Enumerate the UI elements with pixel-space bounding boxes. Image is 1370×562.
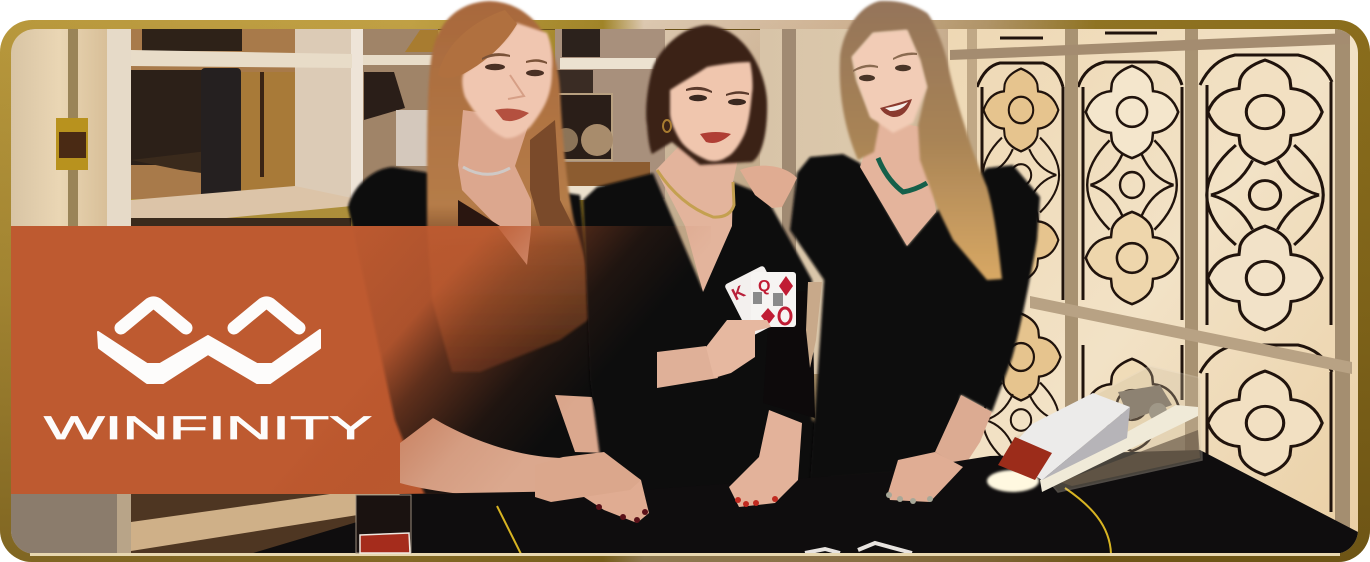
deck top (1003, 393, 1130, 480)
dress (790, 154, 1040, 480)
upper shelf right (363, 55, 435, 65)
bottom rim highlight (30, 553, 1340, 556)
wall bracket (56, 118, 88, 170)
lower shelf (131, 186, 352, 218)
shoe case (1012, 366, 1202, 492)
lower shelf area (131, 494, 356, 553)
hand left woman upper (535, 452, 641, 502)
woman middle (583, 25, 830, 495)
column (107, 29, 131, 229)
neck and chest (860, 118, 936, 246)
beige gap at waist (806, 282, 822, 368)
lamp (405, 30, 440, 52)
hair (427, 1, 595, 372)
yellow line right (1065, 488, 1111, 554)
lips (495, 109, 529, 121)
forearm (400, 418, 565, 497)
lattice vertical bars (1065, 29, 1078, 459)
room behind left woman (363, 29, 438, 199)
card queen: Q (758, 278, 770, 295)
brows and eyes (853, 53, 917, 81)
shelving interior (131, 29, 301, 199)
hand holding cards (706, 320, 771, 378)
hand right woman (888, 452, 963, 502)
shoe mechanism (1118, 385, 1172, 420)
deck side (1042, 407, 1130, 480)
lips (700, 132, 731, 143)
dress (583, 173, 830, 495)
logo mark (98, 303, 320, 383)
nails right (886, 492, 933, 504)
hand left woman lower (584, 480, 649, 523)
table (250, 450, 1358, 554)
column middle (295, 29, 351, 204)
shoe rail (1040, 405, 1198, 492)
card box left (356, 495, 411, 553)
brows and eyes (686, 87, 749, 105)
face (852, 30, 927, 133)
brass rod (68, 29, 78, 229)
hand on shoulder (740, 166, 797, 208)
room behind middle woman (555, 29, 665, 199)
face (670, 62, 753, 161)
left wall (11, 29, 107, 554)
lattice horizontal bars (950, 33, 1350, 60)
card shoe (987, 366, 1202, 492)
picture frame (554, 94, 613, 160)
playing cards (706, 265, 796, 378)
shelf behind middle woman (560, 58, 656, 69)
chest (656, 145, 740, 292)
gold necklace (657, 170, 734, 217)
upper shelf (131, 50, 352, 68)
hands (535, 410, 963, 523)
dark under hair (530, 120, 573, 226)
hair (646, 25, 767, 165)
green necklace (878, 158, 927, 192)
table logo fragment (805, 543, 912, 553)
panel one motifs (984, 69, 1058, 151)
silver necklace (463, 167, 510, 174)
bottle (201, 68, 241, 200)
hair (840, 1, 1002, 280)
neck and chest (458, 110, 531, 265)
centre wall (760, 29, 955, 374)
nails left (596, 504, 648, 523)
right forearm (935, 395, 992, 468)
shoe lower tray (1060, 430, 1200, 486)
red card back (998, 437, 1052, 480)
hair fringe (438, 10, 517, 78)
dress (348, 167, 606, 495)
nails middle (735, 496, 778, 507)
brand panel underlay (270, 374, 426, 494)
brows and eyes (482, 53, 547, 76)
translucent brand panel (11, 226, 711, 494)
face (462, 23, 552, 138)
wordmark: WINFINITY (44, 410, 372, 446)
dark v beside chest (458, 200, 500, 226)
middle arm sleeve (763, 290, 815, 418)
panel frames (977, 33, 1332, 512)
earring (663, 120, 671, 132)
lips and teeth (880, 99, 912, 117)
nose shadow (508, 75, 524, 99)
middle forearm and hand (729, 410, 802, 507)
panel three motifs (1208, 60, 1322, 164)
woman right (740, 1, 1040, 480)
wooden box (558, 162, 650, 186)
red card (360, 533, 410, 553)
lower left wall (11, 494, 121, 554)
lattice screen (948, 29, 1358, 554)
logo (44, 303, 372, 446)
yellow line left (497, 506, 521, 554)
upper arm (555, 395, 608, 453)
panel two motifs (1086, 66, 1178, 158)
forearm holding cards (657, 346, 718, 388)
card king: K (729, 281, 749, 304)
shoe glow (987, 470, 1039, 492)
woman left (348, 1, 608, 497)
